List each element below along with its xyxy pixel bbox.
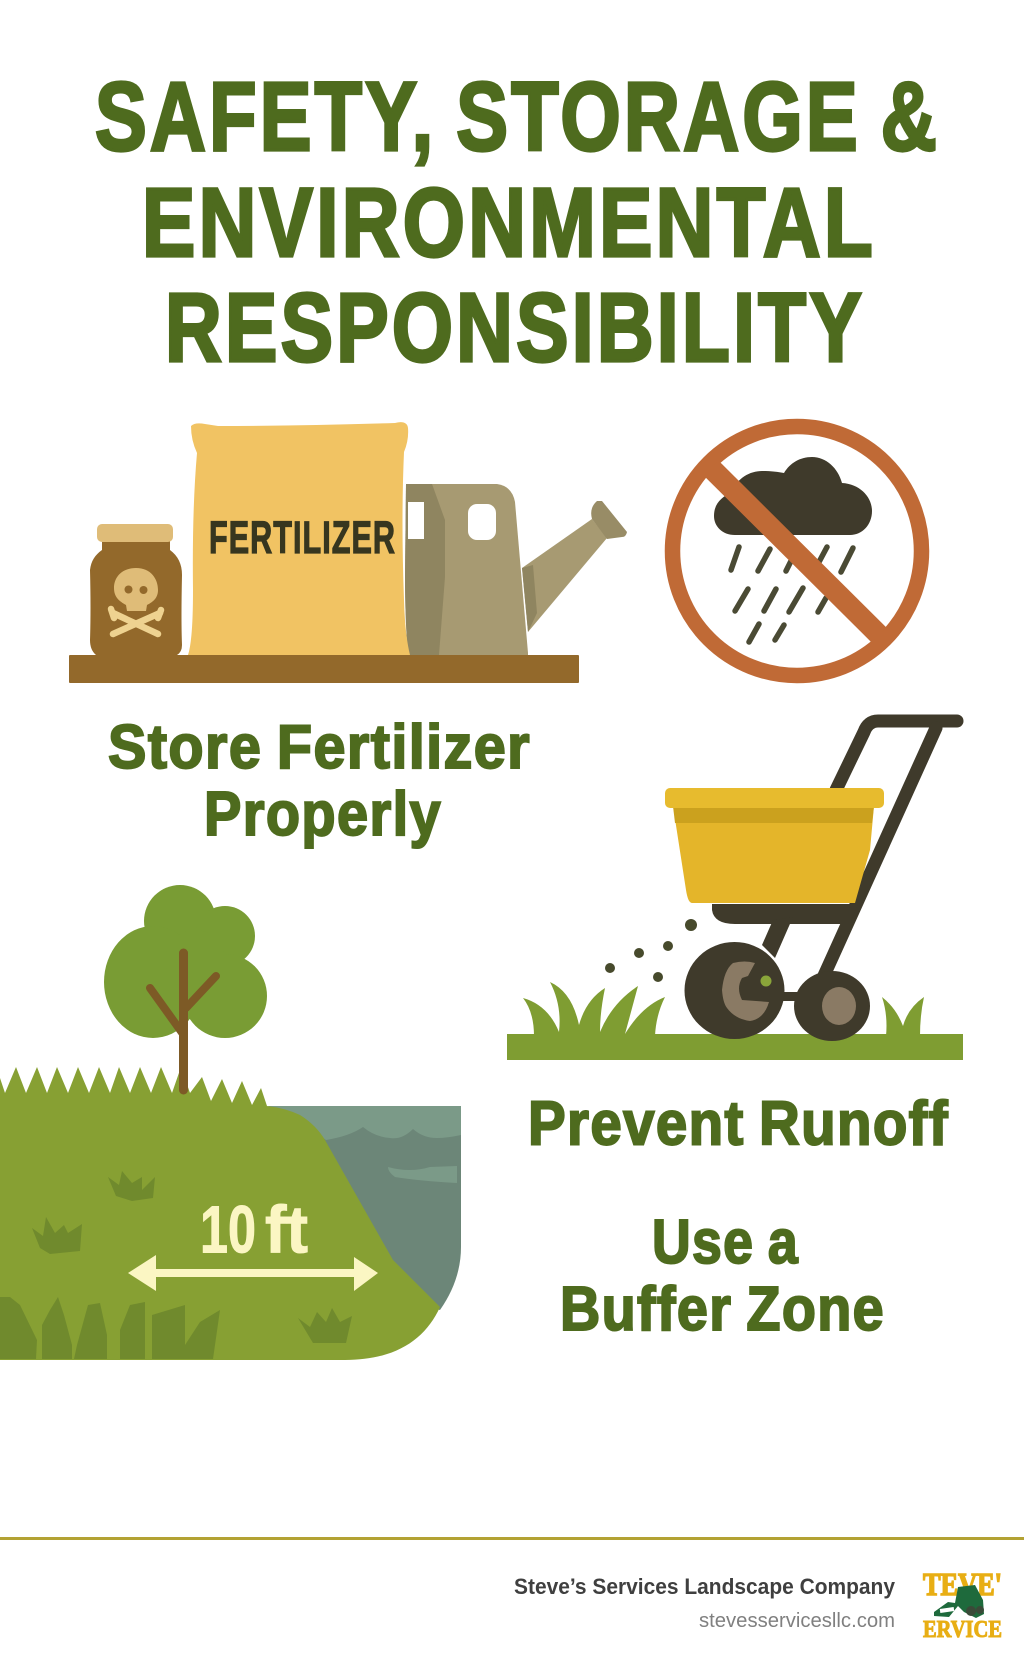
label: 10 ft [200, 1192, 308, 1268]
icon: fertilizer bag [188, 422, 410, 655]
heading: use a buffer zone [560, 1208, 885, 1344]
icon: company logo [923, 1566, 1002, 1643]
heading: use a buffer zone: Buffer Zone [560, 1275, 885, 1344]
heading: store fertilizer properly: Properly [204, 780, 442, 849]
grass tufts [523, 982, 665, 1036]
footer: company text: stevesservicesllc.com [699, 1610, 895, 1632]
icon: watering can [405, 484, 627, 655]
icon: no rain sign [672, 426, 922, 676]
icon: tree [104, 885, 267, 1090]
heading: use a buffer zone: Use a [652, 1208, 799, 1277]
shelf [69, 655, 579, 683]
panel: fertilizer storage shelf [69, 422, 627, 683]
hopper [673, 806, 874, 903]
footer rule [0, 1537, 1024, 1540]
ground [507, 1034, 963, 1060]
title [95, 62, 940, 382]
front wheel [684, 942, 784, 1039]
axle [780, 992, 800, 1001]
footer: company text [514, 1574, 896, 1632]
icon: company logo: TEVE' [923, 1566, 1002, 1602]
land and grass edge [0, 1067, 440, 1360]
icon: company logo: ERVICE [923, 1617, 1002, 1643]
arrow: double-headed 10 ft width [128, 1255, 378, 1291]
footer: company text: Steve’s Services Landscape Company [514, 1574, 896, 1599]
label: 10 ft: ft [265, 1192, 308, 1268]
heading: store fertilizer properly: Store Fertilizer [108, 713, 531, 782]
panel: buffer zone illustration [0, 885, 461, 1360]
handle [822, 721, 957, 980]
water [268, 1106, 461, 1310]
title: RESPONSIBILITY [165, 273, 865, 382]
icon: poison jar [90, 524, 182, 655]
heading: store fertilizer properly [108, 713, 531, 849]
rear wheel [794, 971, 870, 1041]
label: 10 ft: 10 [200, 1192, 256, 1268]
darker grass patches [0, 1171, 352, 1359]
title: ENVIRONMENTAL [142, 168, 876, 277]
fertilizer label: FERTILIZER [209, 512, 396, 563]
chassis [712, 904, 858, 924]
fertilizer granules [605, 919, 697, 982]
icon: fertilizer spreader [507, 721, 963, 1060]
heading: prevent runoff: Prevent Runoff [528, 1090, 949, 1158]
